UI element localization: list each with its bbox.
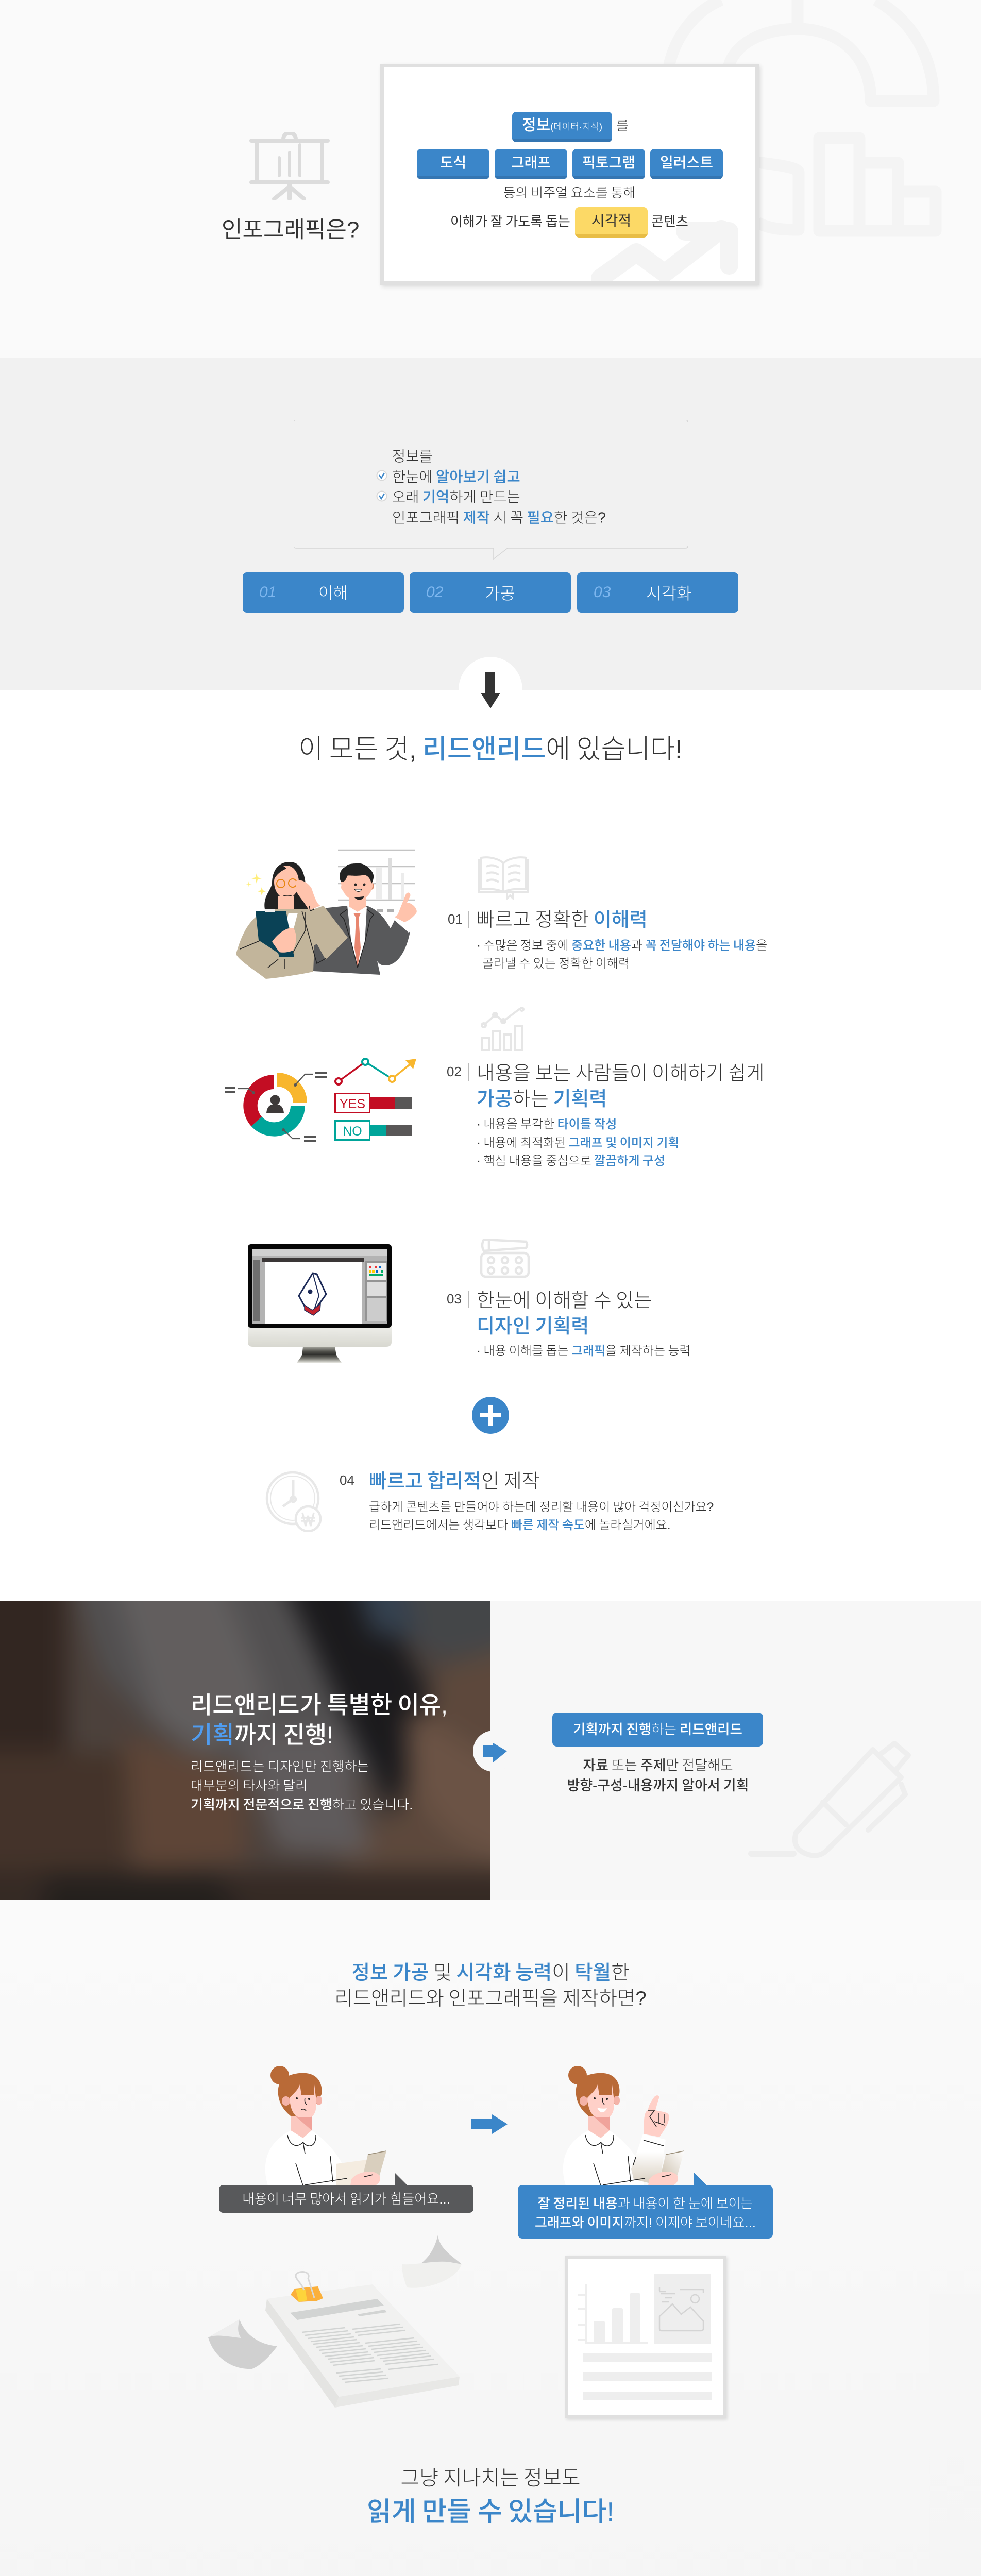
card watermark arrow — [591, 220, 738, 281]
number 03: 03 — [447, 1291, 462, 1307]
faint background block — [929, 2294, 981, 2576]
heading — [334, 1962, 647, 2010]
illustration: monitor — [248, 1244, 392, 1363]
document card with chart — [565, 2256, 726, 2418]
icon: chart with line — [481, 1007, 525, 1051]
description 04: 급하게 콘텐츠를 만들어야 하는데 정리할 내용이 많아 걱정이신가요? — [369, 1500, 714, 1514]
speech bubble tail: gray — [395, 2173, 407, 2185]
step 03 visualization: 시각화 — [646, 584, 691, 603]
icon: open book — [478, 856, 529, 900]
question text: 정보를 — [392, 448, 433, 465]
step 01 understanding: 01 — [259, 584, 276, 601]
illustration: charts donut yes no — [225, 1058, 416, 1142]
speech bubble tail: blue — [694, 2173, 706, 2185]
speech bubble: clear content — [518, 2185, 773, 2239]
button: information: 정보 — [522, 116, 550, 134]
heading: 리드앤리드와 인포그래픽을 제작하면? — [334, 1988, 647, 2010]
icon: presentation board — [249, 132, 330, 200]
button: graph: 그래프 — [511, 155, 551, 171]
button: visual — [575, 207, 648, 238]
title: 기획까지 진행! — [191, 1722, 333, 1749]
description 02 — [477, 1117, 680, 1168]
button: illustration — [650, 149, 723, 179]
illustration: happy woman — [568, 2066, 684, 2185]
speech box outline — [294, 420, 688, 560]
button: pictogram — [572, 149, 645, 179]
number 01: 01 — [448, 911, 463, 927]
question text — [392, 448, 606, 526]
button: planning — [552, 1713, 763, 1747]
step 02 processing: 가공 — [485, 584, 515, 603]
icon: paint palette — [480, 1239, 530, 1278]
question text: 오래 기억하게 만드는 — [392, 489, 520, 506]
button: information — [512, 112, 612, 142]
text: via visual elements: 등의 비주얼 요소를 통해 — [503, 185, 635, 200]
button: diagram — [417, 149, 489, 179]
description 03: · 내용 이해를 돕는 그래픽을 제작하는 능력 — [477, 1344, 691, 1358]
description 02: · 내용을 부각한 타이틀 작성 — [477, 1117, 617, 1131]
description 02: · 내용에 최적화된 그래프 및 이미지 기획 — [477, 1136, 680, 1149]
button: illustration: 일러스트 — [660, 155, 713, 171]
illustration: document stack and papers — [208, 2235, 462, 2408]
text: content: 콘텐츠 — [651, 214, 688, 229]
title 03: 한눈에 이해할 수 있는 — [477, 1290, 652, 1312]
icon: plus — [472, 1397, 509, 1434]
illustration: charts donut yes no: YES — [340, 1097, 365, 1111]
definition card — [380, 64, 759, 285]
text: helps understanding: 이해가 잘 가도록 돕는 — [450, 214, 570, 229]
description — [191, 1759, 413, 1812]
button: diagram: 도식 — [440, 155, 466, 171]
panel: what is an infographic — [0, 0, 981, 358]
arrow: right — [471, 2114, 508, 2134]
description 04: 리드앤리드에서는 생각보다 빠른 제작 속도에 놀라실거에요. — [369, 1518, 671, 1532]
step 01 understanding — [243, 572, 404, 613]
speech bubble: clear content: 잘 정리된 내용과 내용이 한 눈에 보이는 — [538, 2196, 753, 2211]
illustration: troubled woman — [270, 2066, 386, 2185]
check icon 2 — [376, 490, 387, 502]
text: particle: 를 — [616, 118, 629, 133]
panel: features — [0, 690, 981, 1601]
panel: why lead and lead — [0, 1601, 981, 1900]
description: 리드앤리드는 디자인만 진행하는 — [191, 1759, 369, 1774]
step 01 understanding: 이해 — [318, 584, 348, 602]
panel: what is needed — [0, 358, 981, 690]
text: from data to plan — [567, 1758, 749, 1793]
step 03 visualization — [577, 572, 738, 613]
description 01: · 수많은 정보 중에 중요한 내용과 꼭 전달해야 하는 내용을 — [477, 939, 767, 953]
check icon 1 — [376, 470, 387, 481]
title — [191, 1692, 448, 1749]
heading: 이 모든 것, 리드앤리드에 있습니다! — [298, 735, 683, 765]
closing highlight: 읽게 만들 수 있습니다! — [367, 2497, 614, 2527]
blurred photo background — [0, 1601, 490, 1900]
icon: pen watermark — [748, 1741, 911, 1858]
title 03 — [477, 1290, 652, 1337]
speech bubble: clear content: 그래프와 이미지까지! 이제야 보이네요... — [535, 2215, 756, 2230]
title 02: 내용을 보는 사람들이 이해하기 쉽게 — [477, 1063, 764, 1084]
mini chart and image — [578, 2274, 712, 2400]
speech bubble: too much text — [219, 2185, 473, 2213]
step 02 processing — [410, 572, 571, 613]
text: from data to plan: 자료 또는 주제만 전달해도 — [583, 1758, 733, 1773]
step 02 processing: 02 — [426, 584, 443, 601]
button: planning: 기획까지 진행하는 리드앤리드 — [573, 1722, 742, 1737]
panel: before after — [0, 1900, 981, 2576]
title: 인포그래픽은? — [222, 217, 359, 243]
question text: 인포그래픽 제작 시 꼭 필요한 것은? — [392, 510, 606, 526]
illustration: two business people — [236, 849, 417, 979]
text: from data to plan: 방향-구성-내용까지 알아서 기획 — [567, 1778, 749, 1793]
title 02 — [477, 1063, 764, 1110]
button: information: (데이터·지식) — [550, 122, 602, 132]
background watermark icons — [649, 0, 981, 247]
illustration: charts donut yes no: NO — [343, 1124, 362, 1139]
number 04: 04 — [340, 1472, 354, 1488]
title 03: 디자인 기획력 — [477, 1316, 589, 1337]
title 02: 가공하는 기획력 — [477, 1089, 607, 1110]
arrow: down — [481, 672, 500, 708]
step 03 visualization: 03 — [594, 584, 611, 601]
icon: white dome — [459, 657, 522, 690]
button: visual: 시각적 — [591, 213, 631, 229]
description 02: · 핵심 내용을 중심으로 깔끔하게 구성 — [477, 1154, 665, 1168]
description: 기획까지 전문적으로 진행하고 있습니다. — [191, 1797, 413, 1812]
button: graph — [495, 149, 567, 179]
closing text: 그냥 지나치는 정보도 — [400, 2467, 581, 2489]
number 02: 02 — [447, 1064, 462, 1079]
icon: circle with arrow — [473, 1731, 507, 1771]
description 04 — [369, 1500, 714, 1532]
button: pictogram: 픽토그램 — [582, 155, 635, 171]
description 01: 골라낼 수 있는 정확한 이해력 — [482, 957, 630, 971]
icon: clock and won — [266, 1471, 322, 1532]
question text: 한눈에 알아보기 쉽고 — [392, 469, 520, 485]
description: 대부분의 타사와 달리 — [191, 1778, 308, 1793]
description 01 — [477, 939, 767, 971]
title 04: 빠르고 합리적인 제작 — [369, 1471, 540, 1493]
title 01: 빠르고 정확한 이해력 — [477, 909, 648, 931]
speech bubble: too much text: 내용이 너무 많아서 읽기가 힘들어요... — [242, 2191, 450, 2207]
title: 리드앤리드가 특별한 이유, — [191, 1692, 448, 1719]
heading: 정보 가공 및 시각화 능력이 탁월한 — [351, 1962, 630, 1984]
